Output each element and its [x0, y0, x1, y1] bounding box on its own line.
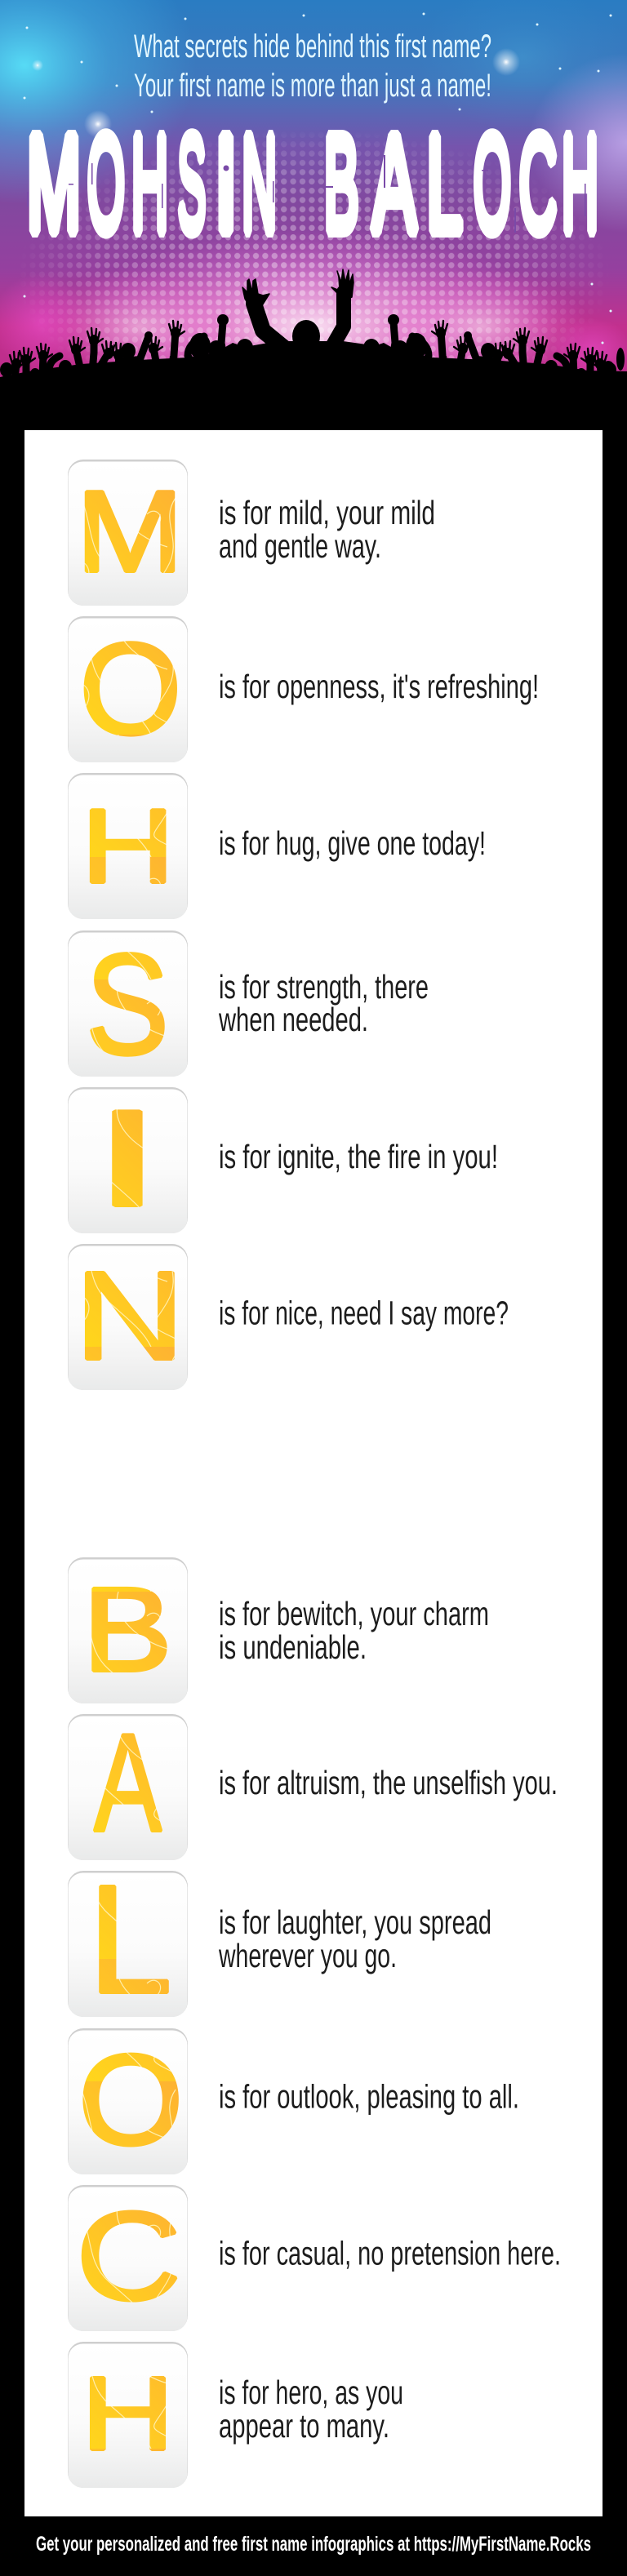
row: O	[68, 615, 539, 762]
title: name: C	[519, 106, 557, 260]
row: B	[68, 1557, 489, 1703]
text B	[219, 1595, 489, 1666]
stage backdrop	[0, 0, 627, 377]
header banner	[0, 0, 627, 377]
tile H second	[68, 2342, 188, 2488]
title: name: M	[27, 106, 81, 260]
tile H	[68, 773, 188, 919]
text H second	[219, 2374, 403, 2445]
text M: is for mild, your mild	[219, 494, 435, 531]
row: A	[68, 1705, 558, 1861]
text H second: appear to many.	[219, 2407, 389, 2445]
text L: wherever you go.	[218, 1937, 397, 1974]
tile B	[68, 1557, 188, 1703]
row: O second	[68, 2028, 519, 2174]
title: name: N	[242, 106, 277, 260]
title: name: I	[215, 106, 238, 260]
text L	[218, 1903, 491, 1974]
title: name	[27, 106, 598, 260]
text N: is for nice, need I say more?	[219, 1295, 509, 1332]
row: S	[68, 925, 429, 1085]
panel: letters	[24, 430, 603, 2516]
central figure	[242, 269, 354, 359]
title: name: B	[324, 106, 359, 260]
text H: is for hug, give one today!	[219, 824, 486, 862]
tile A: A	[94, 1705, 162, 1861]
text I: is for ignite, the fire in you!	[219, 1138, 498, 1175]
row: I	[68, 1081, 498, 1235]
crowd silhouette	[0, 269, 627, 430]
row: L	[68, 1854, 491, 2026]
text M	[219, 494, 435, 565]
tile N: N	[74, 1246, 185, 1386]
sparkles	[23, 13, 612, 344]
title: name: L	[427, 106, 462, 260]
title: name: A	[372, 106, 416, 260]
row: C	[68, 2185, 561, 2331]
text S: when needed.	[218, 1001, 368, 1038]
tile O: O	[79, 615, 182, 762]
title: name: S	[178, 106, 206, 260]
text B: is undeniable.	[219, 1628, 367, 1666]
title: name: O	[474, 106, 511, 260]
row: H	[68, 773, 486, 919]
text H second: is for hero, as you	[219, 2374, 403, 2411]
row: H second	[68, 2342, 403, 2488]
tile B: B	[82, 1563, 172, 1697]
row: N	[68, 1244, 509, 1390]
text M: and gentle way.	[219, 527, 381, 565]
tile I	[68, 1081, 188, 1235]
tile L: L	[88, 1854, 172, 2026]
heading: tagline	[134, 29, 491, 104]
tile I: I	[91, 1081, 163, 1235]
tile H: H	[81, 788, 175, 905]
tile H second: H	[82, 2356, 174, 2472]
text S: is for strength, there	[219, 968, 429, 1006]
tile O second: O	[78, 2028, 184, 2172]
title: name: O	[87, 106, 125, 260]
text S	[218, 968, 429, 1038]
text B: is for bewitch, your charm	[219, 1595, 489, 1632]
tile C: C	[76, 2186, 181, 2326]
text L: is for laughter, you spread	[219, 1903, 491, 1941]
tile M: M	[76, 467, 184, 597]
row: M	[68, 460, 435, 606]
title: name: H	[131, 106, 168, 260]
tile S: S	[86, 925, 169, 1085]
